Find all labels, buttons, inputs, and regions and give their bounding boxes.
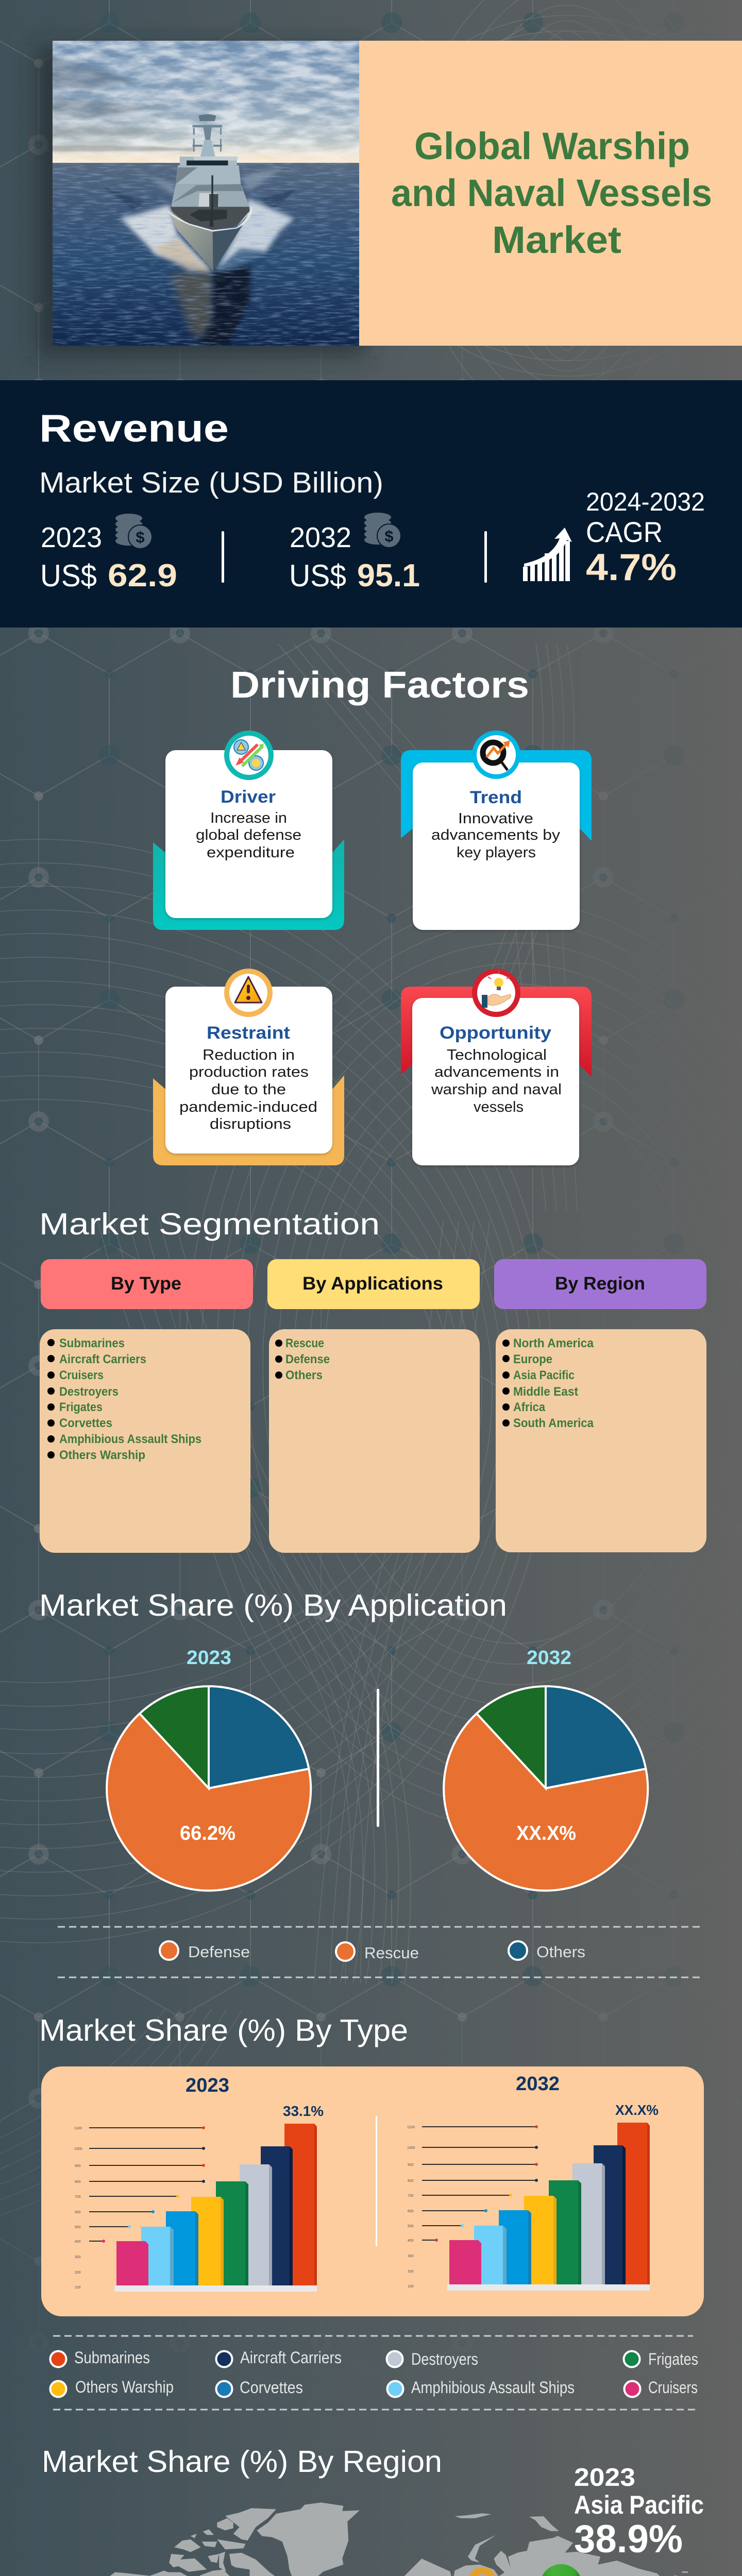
title panel bbox=[359, 41, 742, 346]
bar chart 2032: 1000 bbox=[407, 2146, 415, 2150]
panel: type list: Others Warship bbox=[59, 1448, 145, 1462]
map: eurasia africa oceania bbox=[352, 2513, 702, 2576]
bar chart 2032: 500 bbox=[408, 2225, 414, 2228]
CAGR: 4.7% bbox=[586, 547, 677, 588]
bar chart 2023 bbox=[74, 2075, 324, 2292]
bar chart 2032: XX.X% bbox=[615, 2102, 659, 2118]
legend: application: Rescue bbox=[364, 1944, 419, 1962]
restraint text: Reduction in bbox=[203, 1047, 295, 1063]
image shadow bbox=[37, 46, 367, 355]
legend: application bbox=[160, 1941, 585, 1962]
legend: type: Amphibious Assault Ships bbox=[411, 2378, 575, 2397]
divider bbox=[222, 531, 224, 583]
panel: application list: Rescue bbox=[285, 1336, 324, 1350]
panel: type charts bbox=[41, 2066, 704, 2316]
revenue 2023: 2023 bbox=[41, 521, 102, 553]
legend: type: Submarines bbox=[74, 2348, 150, 2367]
divider bbox=[377, 1689, 379, 1827]
restraint text: production rates bbox=[189, 1064, 309, 1080]
revenue 2032: 95.1 bbox=[357, 558, 420, 594]
opportunity label: Opportunity bbox=[440, 1023, 551, 1043]
driving factors heading: Driving Factors bbox=[230, 665, 529, 706]
bar chart 2032: 100 bbox=[408, 2285, 414, 2289]
trend text: key players bbox=[457, 844, 536, 861]
opportunity text: Technological bbox=[447, 1047, 547, 1063]
panel: type list: Amphibious Assault Ships bbox=[59, 1432, 201, 1446]
icon: trend magnifier bbox=[483, 740, 510, 770]
panel: region list: North America bbox=[513, 1336, 594, 1350]
panel: type list: Cruisers bbox=[59, 1368, 104, 1382]
revenue 2023: 62.9 bbox=[108, 558, 177, 594]
bar chart 2032: 700 bbox=[408, 2194, 414, 2198]
pin: asia pacific bbox=[540, 2564, 582, 2576]
icon: coins 2023 bbox=[115, 514, 152, 549]
driver text: expenditure bbox=[207, 844, 295, 861]
card: opportunity bbox=[401, 969, 592, 1165]
tab: by applications: By Applications bbox=[302, 1274, 443, 1294]
tab: by type bbox=[41, 1259, 253, 1309]
bar chart 2023: 1000 bbox=[74, 2147, 82, 2151]
panel: type list: Submarines bbox=[59, 1336, 125, 1350]
opportunity text bbox=[431, 1047, 562, 1115]
opportunity text: warship and naval bbox=[431, 1081, 562, 1098]
bar chart 2023: 400 bbox=[75, 2240, 81, 2244]
icon: coins 2023: $ bbox=[136, 528, 145, 546]
bar chart 2023: 33.1% bbox=[283, 2103, 324, 2119]
bar chart 2032: 600 bbox=[408, 2210, 414, 2213]
legend: type: Cruisers bbox=[648, 2378, 698, 2397]
revenue 2032 bbox=[289, 521, 420, 594]
restraint text bbox=[179, 1047, 317, 1132]
market segmentation heading: Market Segmentation bbox=[39, 1207, 380, 1241]
pie chart 2032: 2032 bbox=[527, 1647, 571, 1669]
region callout bbox=[574, 2464, 704, 2561]
title: and Naval Vessels bbox=[391, 172, 712, 214]
legend: type: Frigates bbox=[648, 2350, 698, 2368]
bar chart 2032 bbox=[407, 2073, 659, 2291]
icon: growth chart arrow bbox=[523, 528, 572, 581]
bar chart 2032: 800 bbox=[408, 2179, 414, 2183]
market share by region heading: Market Share (%) By Region bbox=[42, 2445, 442, 2479]
legend: type: Others Warship bbox=[75, 2378, 174, 2396]
trend text bbox=[431, 810, 561, 861]
pie chart 2023: 66.2% bbox=[180, 1822, 235, 1844]
icon: driver gears and arrows bbox=[234, 740, 264, 770]
hero photo: warship at sea bbox=[52, 39, 361, 347]
legend: type: Corvettes bbox=[240, 2378, 303, 2397]
bar chart 2023: 600 bbox=[75, 2211, 81, 2214]
bar chart 2023: 1100 bbox=[74, 2127, 82, 2130]
tab: by region: By Region bbox=[555, 1274, 645, 1294]
card: driver bbox=[153, 731, 344, 930]
market share by application heading: Market Share (%) By Application bbox=[39, 1588, 507, 1622]
revenue 2023 bbox=[40, 521, 177, 594]
map: americas and greenland bbox=[100, 2502, 360, 2576]
legend: type bbox=[50, 2348, 698, 2397]
panel: type list: Corvettes bbox=[59, 1416, 112, 1430]
market size label: Market Size (USD Billion) bbox=[39, 466, 383, 499]
icon: coins 2032 bbox=[364, 513, 401, 548]
driver text: global defense bbox=[196, 827, 301, 843]
panel: type list: Destroyers bbox=[59, 1385, 119, 1399]
revenue 2032: 2032 bbox=[290, 521, 351, 553]
tab: by applications bbox=[267, 1259, 480, 1309]
CAGR: CAGR bbox=[586, 516, 663, 548]
world map bbox=[100, 2502, 702, 2576]
revenue panel bbox=[0, 380, 742, 628]
title: Market bbox=[492, 218, 621, 261]
divider bbox=[376, 2116, 377, 2246]
panel: application list bbox=[269, 1329, 480, 1553]
trend text: Innovative bbox=[458, 810, 533, 827]
tab: by type: By Type bbox=[111, 1274, 181, 1294]
CAGR: 2024-2032 bbox=[586, 487, 705, 516]
revenue heading: Revenue bbox=[39, 406, 229, 450]
panel: region list: South America bbox=[513, 1416, 594, 1430]
bar chart 2023: 2023 bbox=[185, 2075, 229, 2096]
region callout: 38.9% bbox=[574, 2517, 683, 2561]
pie chart 2032 bbox=[444, 1647, 648, 1891]
panel: type list: Aircraft Carriers bbox=[59, 1352, 146, 1366]
legend: type: Aircraft Carriers bbox=[240, 2348, 342, 2367]
card: restraint bbox=[153, 969, 344, 1165]
revenue 2032: US$ bbox=[289, 558, 346, 593]
icon: coins 2032: $ bbox=[384, 527, 394, 545]
bar chart 2032: 2032 bbox=[516, 2073, 560, 2095]
legend: application: Defense bbox=[188, 1943, 250, 1961]
pie chart 2023 bbox=[107, 1647, 311, 1891]
tab: by region bbox=[494, 1259, 706, 1309]
panel: region list bbox=[496, 1329, 706, 1552]
title bbox=[391, 125, 712, 261]
driver text bbox=[196, 810, 301, 861]
icon: warning triangle bbox=[235, 977, 262, 1003]
bar chart 2023: 100 bbox=[75, 2286, 81, 2290]
bar chart 2023: 900 bbox=[75, 2164, 81, 2168]
bar chart 2032: 200 bbox=[408, 2270, 414, 2274]
pin: europe bbox=[468, 2567, 496, 2576]
bar chart 2023: 500 bbox=[75, 2226, 81, 2229]
opportunity text: vessels bbox=[474, 1099, 524, 1115]
bar chart 2032: 1100 bbox=[407, 2126, 415, 2129]
trend text: advancements by bbox=[431, 827, 561, 843]
restraint label: Restraint bbox=[207, 1023, 290, 1043]
bar chart 2023: 200 bbox=[75, 2271, 81, 2275]
card: trend bbox=[401, 731, 592, 930]
restraint text: disruptions bbox=[210, 1116, 291, 1132]
restraint text: due to the bbox=[211, 1081, 286, 1098]
CAGR bbox=[586, 487, 705, 588]
trend label: Trend bbox=[470, 788, 522, 807]
panel: region list: Europe bbox=[513, 1352, 552, 1366]
driver label: Driver bbox=[221, 787, 276, 807]
panel: type list: Frigates bbox=[59, 1400, 103, 1414]
bar chart 2032: 900 bbox=[408, 2163, 414, 2167]
divider bbox=[484, 531, 487, 583]
region callout: 2023 bbox=[574, 2464, 635, 2492]
region callout: Asia Pacific bbox=[574, 2490, 704, 2519]
market share by type heading: Market Share (%) By Type bbox=[39, 2013, 408, 2047]
bar chart 2023: 300 bbox=[75, 2256, 81, 2259]
legend: application: Others bbox=[536, 1943, 585, 1961]
panel: region list: Asia Pacific bbox=[513, 1368, 575, 1382]
revenue 2023: US$ bbox=[40, 558, 97, 593]
driver text: Increase in bbox=[210, 810, 287, 826]
panel: type list bbox=[40, 1329, 250, 1553]
bar chart 2032: 300 bbox=[408, 2255, 414, 2258]
bar chart 2023: 800 bbox=[75, 2180, 81, 2184]
bar chart 2023: 700 bbox=[75, 2195, 81, 2199]
bar chart 2032: 400 bbox=[408, 2239, 414, 2243]
panel: region list: Middle East bbox=[513, 1385, 578, 1399]
panel: application list: Defense bbox=[285, 1352, 330, 1366]
panel: application list: Others bbox=[285, 1368, 323, 1382]
restraint text: pandemic-induced bbox=[179, 1099, 317, 1115]
opportunity text: advancements in bbox=[434, 1064, 559, 1080]
panel: region list: Africa bbox=[513, 1400, 546, 1414]
icon: bulb and hand bbox=[482, 971, 511, 1008]
title: Global Warship bbox=[414, 125, 690, 167]
legend: type: Destroyers bbox=[411, 2350, 478, 2368]
pie chart 2023: 2023 bbox=[187, 1647, 231, 1669]
pie chart 2032: XX.X% bbox=[516, 1822, 576, 1844]
